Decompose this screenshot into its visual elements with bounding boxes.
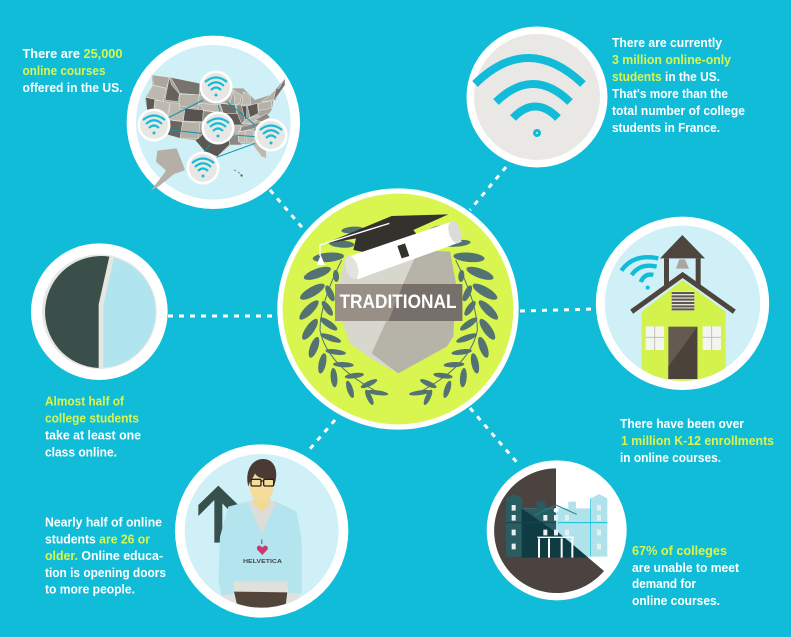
text: 3 million online-only students: There are currently (612, 36, 722, 50)
map: Hawaii (233, 169, 243, 177)
dashed connectors (168, 167, 597, 466)
icon: banner (335, 284, 462, 321)
text: 1 million K-12 enrollments (620, 417, 774, 465)
icon: graduation cap (317, 214, 448, 265)
text: almost half of college students: college students (45, 412, 139, 426)
icon: wifi signal (621, 257, 658, 282)
icon: trousers (234, 592, 288, 608)
icon: up arrow (198, 486, 238, 543)
panel: person circle (175, 444, 348, 618)
heading: TRADITIONAL: TRADITIONAL (340, 291, 457, 313)
chart: 67 percent wedge (494, 468, 604, 593)
text: 25,000 online courses: offered in the US. (22, 81, 122, 95)
icon: head (247, 459, 276, 512)
text: 25,000 online courses (22, 47, 123, 95)
icon: wifi badges on map (138, 70, 288, 184)
text: 1 million K-12 enrollments: 1 million K-12 enrollments (621, 434, 774, 448)
text: almost half of college students: Almost half of (45, 394, 125, 408)
shirt text: I (261, 540, 263, 546)
icon: laurel right (409, 251, 501, 406)
panel: US map circle (127, 36, 300, 209)
icon: schoolhouse (632, 235, 734, 387)
text: 3 million online-only students: students in France. (612, 121, 720, 135)
text: nearly half of online students: to more people. (45, 582, 135, 596)
text: 25,000 online courses: online courses (22, 64, 106, 78)
text: nearly half of online students: students are 26 or (45, 532, 150, 546)
icon: upper leaves (329, 224, 471, 249)
icon: diploma scroll (342, 220, 464, 281)
text: almost half of college students (45, 394, 141, 460)
map: Alaska (151, 148, 185, 191)
text: almost half of college students: take at least one (45, 428, 141, 442)
panel: college circle (487, 460, 627, 600)
text: 3 million online-only students: total number of college (612, 104, 745, 118)
map: connecting lines (168, 100, 255, 157)
panel: wifi circle (466, 26, 608, 168)
shirt text (243, 540, 282, 565)
pie slice: light (103, 258, 156, 368)
text: nearly half of online students (45, 516, 166, 596)
panel: central badge (277, 188, 519, 430)
text: 67 percent of colleges: 67% of colleges (632, 544, 727, 558)
text: 1 million K-12 enrollments: in online courses. (620, 451, 721, 465)
text: 3 million online-only students: 3 million online-only (612, 53, 731, 67)
text: 25,000 online courses: There are 25,000 (22, 47, 123, 61)
icon: heart (257, 545, 268, 555)
text: nearly half of online students: older. Online educa- (45, 549, 163, 563)
text: 67 percent of colleges: are unable to meet (632, 561, 740, 575)
shirt text: HELVETICA (243, 559, 282, 565)
icon: person sweater (218, 502, 302, 597)
text: 1 million K-12 enrollments: There have been over (620, 417, 744, 431)
text: 67 percent of colleges: online courses. (632, 594, 720, 608)
map: United States states (145, 75, 285, 158)
icon: large wifi (475, 58, 583, 134)
text: 67 percent of colleges (632, 544, 740, 608)
panel: schoolhouse circle (596, 217, 769, 390)
text: 3 million online-only students: That's more than the (612, 87, 728, 101)
icon: shield (340, 250, 456, 373)
text: 3 million online-only students: students in the US. (612, 70, 720, 84)
icon: college building (506, 494, 607, 558)
icon: laurel left (297, 251, 389, 406)
text: nearly half of online students: tion is opening doors (45, 566, 166, 580)
pie slice: dark (45, 256, 109, 368)
text: nearly half of online students: Nearly half of online (45, 516, 162, 530)
text: 67 percent of colleges: demand for (632, 577, 696, 591)
panel: pie chart circle (31, 243, 168, 380)
text: 3 million online-only students (612, 36, 745, 135)
text: almost half of college students: class online. (45, 446, 117, 460)
